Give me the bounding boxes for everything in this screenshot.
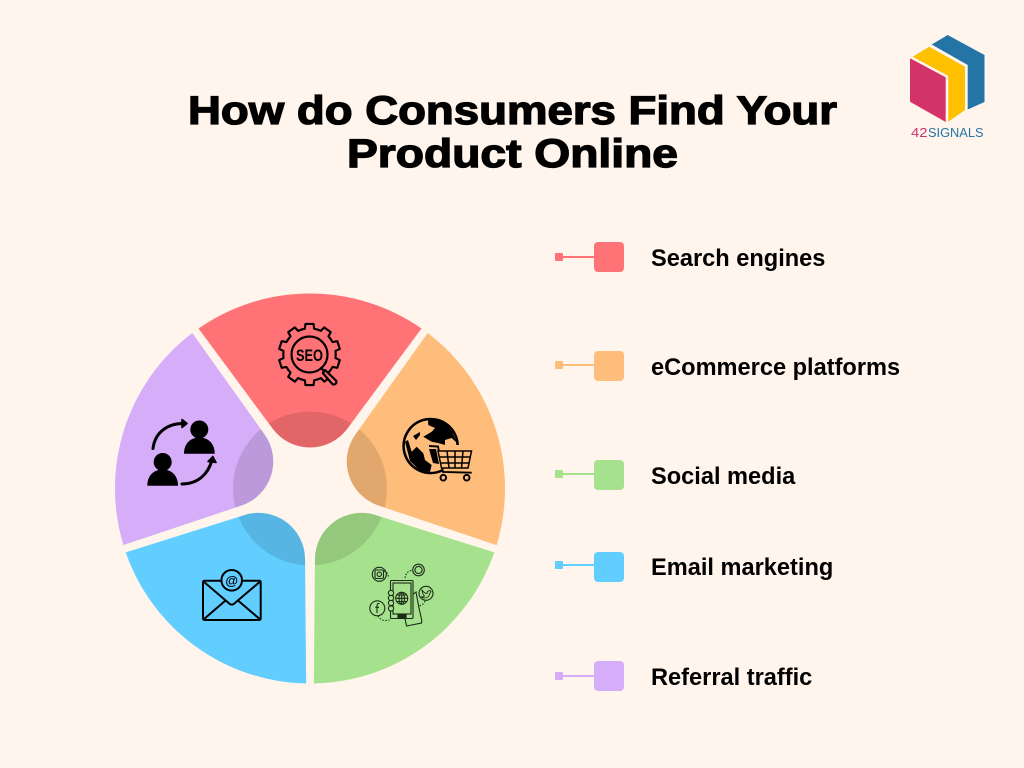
legend item: email marketing <box>555 552 833 582</box>
icon: seo gear: SEO <box>296 346 323 365</box>
donut chart <box>115 294 505 684</box>
logo: 42signals: SIGNALS <box>928 125 984 140</box>
legend item: ecommerce platforms: eCommerce platforms <box>651 355 900 381</box>
icon: seo gear <box>278 324 341 385</box>
legend item: search engines <box>555 242 825 272</box>
legend item: referral traffic <box>555 661 812 691</box>
icon: email envelope: @ <box>225 573 238 588</box>
logo: 42signals <box>910 35 984 140</box>
inner overlap ring <box>233 412 387 566</box>
title: How do Consumers Find Your <box>188 89 837 133</box>
icon: globe with shopping cart <box>404 419 472 481</box>
segment: ecommerce platforms <box>315 322 530 582</box>
icon: referral people <box>147 420 216 486</box>
title <box>188 89 837 176</box>
icon: social media phone <box>370 564 433 626</box>
legend item: ecommerce platforms <box>555 351 900 381</box>
segment: email marketing <box>105 456 376 712</box>
legend item: referral traffic: Referral traffic <box>651 665 812 691</box>
title: Product Online <box>347 132 678 176</box>
segment: referral traffic <box>90 322 305 582</box>
legend item: email marketing: Email marketing <box>651 555 833 581</box>
logo: 42signals: 42 <box>911 125 928 140</box>
icon: email envelope <box>203 570 261 620</box>
legend item: search engines: Search engines <box>651 246 825 272</box>
segment: search engines <box>198 293 422 447</box>
segment: social media <box>244 456 515 712</box>
legend item: social media <box>555 460 796 490</box>
legend <box>555 242 900 691</box>
legend item: social media: Social media <box>651 464 796 490</box>
